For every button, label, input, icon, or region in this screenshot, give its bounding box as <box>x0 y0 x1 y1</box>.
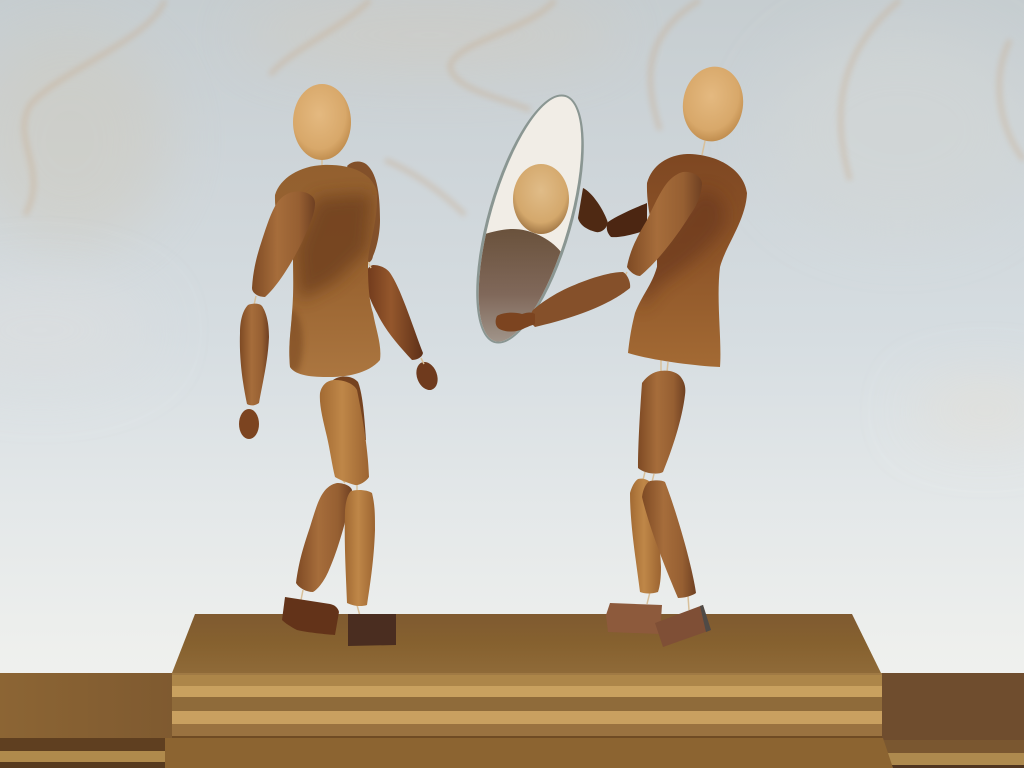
head <box>293 84 351 160</box>
mirror <box>476 94 584 344</box>
table: lower step <box>0 673 1024 768</box>
pins <box>623 141 705 610</box>
forearm left <box>240 304 269 405</box>
thigh <box>638 371 685 474</box>
foot right <box>348 614 396 646</box>
hand <box>496 312 535 332</box>
head <box>678 63 748 145</box>
lower leg front <box>345 490 375 606</box>
foot right dark face <box>700 605 711 632</box>
rear hand <box>578 188 608 232</box>
hand right <box>413 359 441 393</box>
lower leg front <box>642 480 696 598</box>
platform: top and striped side <box>172 614 882 738</box>
forearm <box>531 272 630 327</box>
pins <box>254 158 424 616</box>
forearm right <box>365 265 423 360</box>
foot right <box>655 605 711 647</box>
figure: right mannequin with mirror <box>454 63 748 647</box>
rear upper arm <box>347 162 380 263</box>
foot left <box>282 597 339 635</box>
rear upper arm <box>607 203 647 237</box>
mirror reflection: head <box>513 164 569 234</box>
lower leg back <box>296 483 352 592</box>
lower leg back <box>630 479 661 594</box>
mirror reflection: body <box>478 229 560 342</box>
thigh back <box>333 376 366 440</box>
hand left <box>239 409 259 439</box>
thigh front <box>320 380 369 485</box>
torso <box>628 154 747 367</box>
upper arm <box>252 191 315 297</box>
foot left <box>606 603 662 634</box>
upper arm <box>627 172 702 276</box>
torso <box>275 165 380 377</box>
figure: left mannequin <box>239 84 441 646</box>
